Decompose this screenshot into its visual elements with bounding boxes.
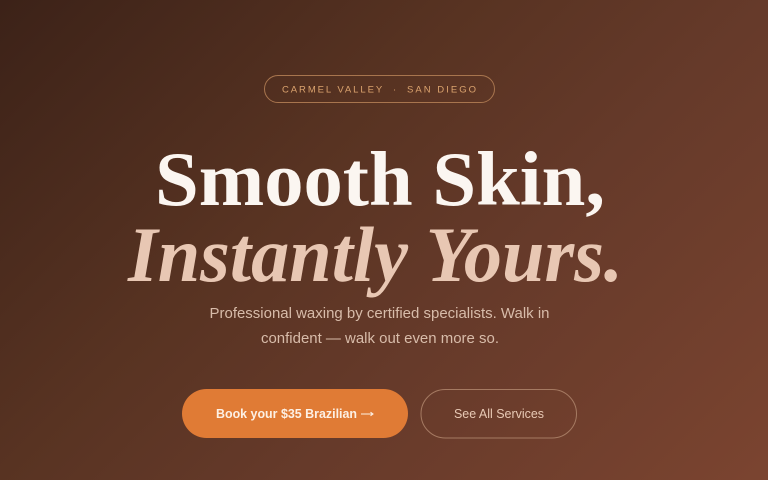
subheading: confident — walk out even more so.: [261, 330, 499, 347]
location badge: ·: [393, 84, 396, 96]
primary button: [182, 389, 408, 438]
headline: Smooth Skin,: [155, 136, 605, 222]
secondary button: See All Services: [454, 406, 544, 421]
headline: Instantly Yours.: [127, 211, 623, 298]
location badge: SAN DIEGO: [407, 84, 476, 96]
subheading: Professional waxing by certified specialists. Walk in: [210, 305, 550, 322]
location badge: CARMEL VALLEY: [282, 84, 383, 96]
secondary button: [421, 390, 576, 438]
arrow: [361, 412, 373, 416]
primary button: Book your $35 Brazilian: [216, 406, 357, 421]
subheading: [210, 305, 550, 347]
location badge: [264, 76, 494, 102]
headline: [127, 136, 623, 298]
